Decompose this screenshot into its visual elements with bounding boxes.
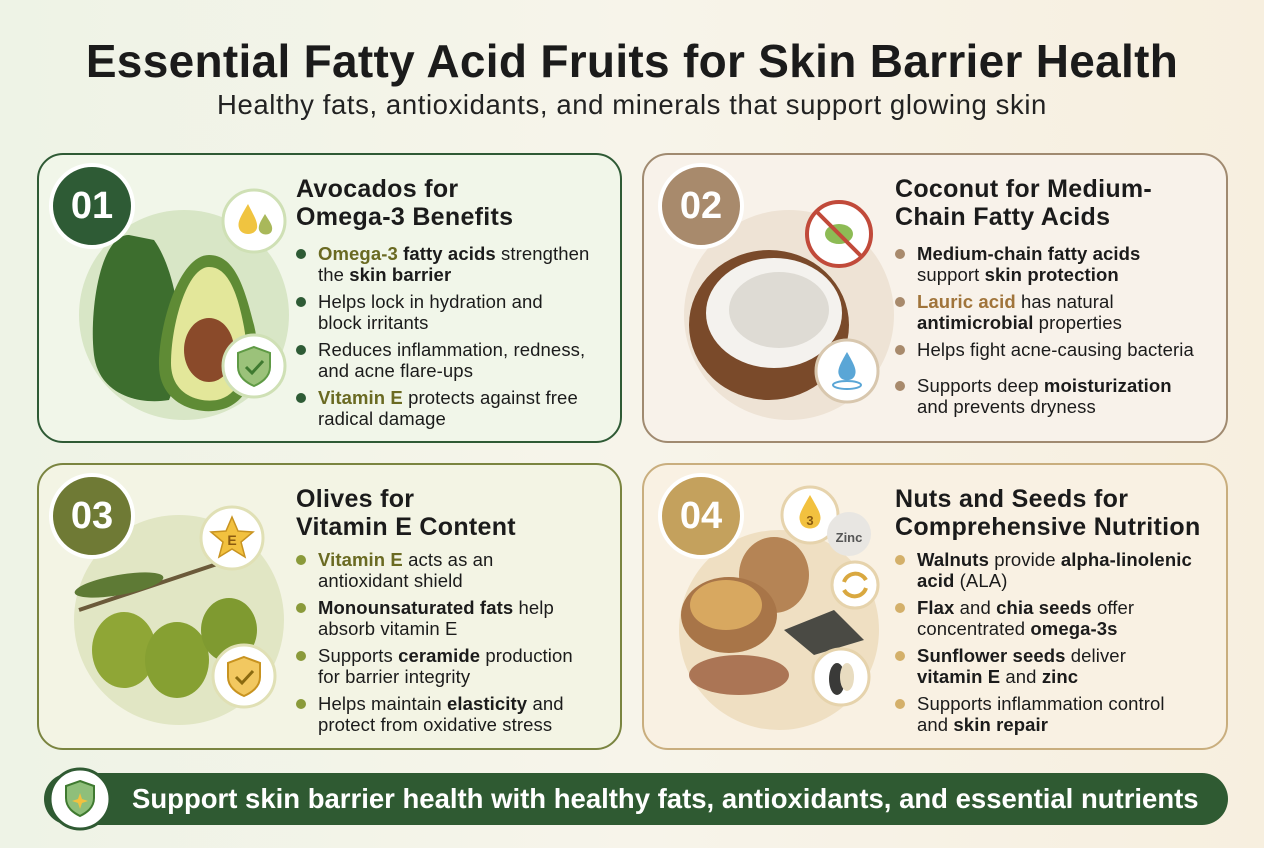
heading: Olives for — [296, 485, 414, 513]
icon: vitamin E star: E — [227, 532, 237, 548]
bullet list — [296, 549, 573, 735]
illustration: coconut — [684, 210, 894, 420]
bullet list: Helps maintain elasticity and — [318, 693, 564, 714]
heading — [895, 485, 1201, 541]
heading: Vitamin E Content — [296, 513, 516, 541]
number badge 01 — [49, 163, 135, 249]
heading: Omega-3 Benefits — [296, 203, 513, 231]
heading — [296, 175, 513, 231]
icon: oil drops — [222, 188, 286, 254]
footer banner — [44, 773, 1228, 825]
bullet list: protect from oxidative stress — [318, 714, 552, 735]
bullet list: Supports ceramide production — [318, 645, 573, 666]
bullet list: antioxidant shield — [318, 570, 463, 591]
bullet list: acid (ALA) — [917, 570, 1007, 591]
icon: sunflower seed — [812, 648, 870, 706]
icon: omega-3 drop: 3 — [806, 513, 814, 528]
illustration: nuts — [679, 530, 879, 730]
number badge 03: 03 — [71, 494, 113, 536]
bullet list: Helps fight acne-causing bacteria — [917, 339, 1194, 360]
icon: water drop — [814, 338, 880, 404]
heading — [296, 485, 516, 541]
bullet list: Walnuts provide alpha-linolenic — [917, 549, 1192, 570]
bullet list: absorb vitamin E — [318, 618, 457, 639]
bullet list: Medium-chain fatty acids — [917, 243, 1140, 264]
heading: Coconut for Medium- — [895, 175, 1152, 203]
heading: Chain Fatty Acids — [895, 203, 1110, 231]
number badge 02: 02 — [680, 184, 722, 226]
bullet list — [296, 243, 589, 429]
bullet list: Omega-3 fatty acids strengthen — [318, 243, 589, 264]
icon: zinc: Zinc — [836, 530, 862, 545]
heading: Avocados for — [296, 175, 458, 203]
number badge 04: 04 — [680, 494, 722, 536]
bullet list: and prevents dryness — [917, 396, 1096, 417]
title: Essential Fatty Acid Fruits for Skin Barrier Health — [86, 35, 1178, 87]
bullet list: block irritants — [318, 312, 428, 333]
bullet list: Sunflower seeds deliver — [917, 645, 1126, 666]
icon: recycle — [830, 560, 880, 610]
bullet list: vitamin E and zinc — [917, 666, 1078, 687]
bullet list — [895, 549, 1192, 735]
footer text: Support skin barrier health with healthy fats, antioxidants, and essential nutrients — [132, 783, 1199, 814]
icon: shield check — [212, 644, 276, 708]
panel: nuts and seeds — [642, 463, 1228, 750]
illustration: avocado — [79, 210, 289, 420]
number badge 02 — [658, 163, 744, 249]
panel: avocados — [37, 153, 622, 443]
bullet list: Helps lock in hydration and — [318, 291, 543, 312]
bullet list: the skin barrier — [318, 264, 451, 285]
icon: zinc — [827, 512, 871, 556]
bullet list: support skin protection — [917, 264, 1119, 285]
heading — [895, 175, 1152, 231]
bullet list: and skin repair — [917, 714, 1048, 735]
bullet list — [895, 243, 1194, 417]
heading: Comprehensive Nutrition — [895, 513, 1201, 541]
number badge 04 — [658, 473, 744, 559]
bullet list: Supports inflammation control — [917, 693, 1165, 714]
icon: no bacteria — [805, 200, 873, 268]
bullet list: Flax and chia seeds offer — [917, 597, 1134, 618]
bullet list: and acne flare-ups — [318, 360, 473, 381]
bullet list: for barrier integrity — [318, 666, 470, 687]
bullet list: Lauric acid has natural — [917, 291, 1114, 312]
bullet list: antimicrobial properties — [917, 312, 1122, 333]
bullet list: Vitamin E protects against free — [318, 387, 578, 408]
icon: shield — [222, 334, 286, 398]
panel: olives — [37, 463, 622, 750]
bullet list: Supports deep moisturization — [917, 375, 1172, 396]
icon: vitamin E star — [200, 506, 264, 570]
icon: shield sparkle — [52, 768, 108, 830]
bullet list: Reduces inflammation, redness, — [318, 339, 585, 360]
bullet list: Vitamin E acts as an — [318, 549, 493, 570]
illustration: olives — [74, 515, 284, 725]
bullet list: concentrated omega-3s — [917, 618, 1118, 639]
bullet list: Monounsaturated fats help — [318, 597, 554, 618]
heading: Nuts and Seeds for — [895, 485, 1128, 513]
icon: omega-3 drop — [780, 486, 840, 544]
number badge 03 — [49, 473, 135, 559]
bullet list: radical damage — [318, 408, 446, 429]
subtitle: Healthy fats, antioxidants, and minerals that support glowing skin — [217, 89, 1047, 120]
number badge 01: 01 — [71, 184, 113, 226]
panel: coconut — [642, 153, 1228, 443]
